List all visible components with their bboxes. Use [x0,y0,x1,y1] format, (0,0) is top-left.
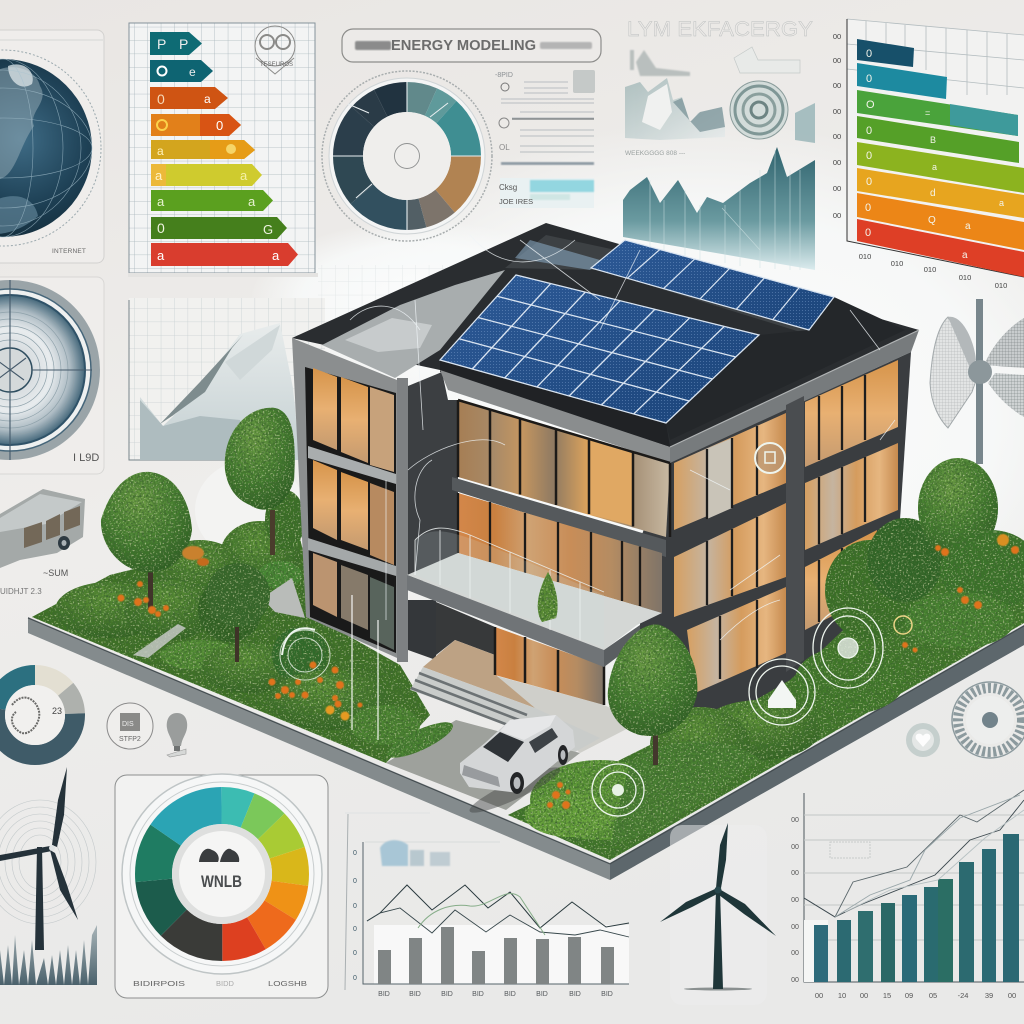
y labels: 00 [791,817,799,824]
turbine [0,767,78,950]
rating arrow H: G [263,222,273,237]
heading: efficiency chart: LYM EKFACERGY [627,18,813,41]
x labels: BID [378,991,390,998]
label: legend heading: -8PID [495,72,513,79]
area chart: upper mountains [625,78,815,143]
rating arrow D: 0 [216,118,223,133]
rating arrow B [150,60,213,82]
y labels: 0 [353,975,357,982]
y axis labels [833,32,841,220]
x labels: 00 [815,991,823,1000]
rating arrow E [151,140,255,159]
y axis labels: 00 [833,184,841,193]
bar glyphs: 0 [866,125,872,137]
chart blob icon [380,840,450,866]
x labels: BID [504,991,516,998]
rating arrow E: a [157,144,164,158]
y axis labels: 00 [833,107,841,116]
bar glyphs: 0 [866,73,872,85]
icon: step badge [107,703,153,749]
x labels: BID [409,991,421,998]
label: gauge captions: LOGSHB [268,979,307,988]
panel: globe [0,30,104,263]
hologram: window badge [755,443,785,473]
icon: bus [0,489,85,596]
hologram: small badge [894,616,912,634]
x labels: BID [569,991,581,998]
hologram: lawn ring [592,764,644,816]
y axis labels: 00 [833,81,841,90]
bar glyphs: B [930,135,936,145]
label: gauge captions: BIDD [216,979,235,988]
bar row 3 teal end [950,104,1018,136]
x axis labels: 010 [995,281,1007,290]
bar row 3 [857,90,1018,136]
text panel: donut legend [495,70,595,208]
windows: upper front [458,400,670,537]
x axis labels: 010 [959,273,971,282]
gauge ring [154,806,290,942]
small donut chart [0,675,75,755]
building [292,223,919,753]
ground platform [28,617,1024,880]
center pillar [397,372,458,662]
rating arrow G: a [157,194,165,209]
panel: gauge [115,774,328,998]
y labels: 0 [353,926,357,933]
label: dial caption: I L9D [73,452,99,464]
windows: left facade [313,368,394,650]
rating arrow I [151,243,298,266]
rating arrow I: a [272,248,280,263]
windows: right facade section two [805,360,898,630]
icon: bus: UIDHJT 2.3 [0,587,42,596]
panel: efficiency charts [623,18,815,270]
y axis labels: 00 [833,32,841,41]
tree: left foreground [101,472,192,610]
icon: lightbulb [167,713,187,757]
x labels: -24 [958,991,968,1000]
x axis labels: 010 [859,252,871,261]
x labels: 39 [985,991,993,1000]
hologram: light columns [352,595,378,740]
label: gauge center: WNLB [201,872,242,891]
tree: rear [225,408,295,555]
solar array: main [440,275,759,423]
bar glyphs: O [866,99,875,111]
bar row 7 [857,193,1024,250]
bar sparkline [0,925,97,985]
x axis labels: 010 [891,259,903,268]
y labels: 00 [791,897,799,904]
bar glyphs: a [932,162,937,172]
floor band: front [452,477,666,557]
bar row 2 [857,63,947,99]
x labels: 00 [1008,991,1016,1000]
y labels: 0 [353,903,357,910]
bar row 8 [857,219,1024,277]
shrubs: front left [160,627,420,745]
entry steps [410,667,600,752]
icon: gear dial [952,682,1024,758]
bar glyphs: 0 [865,202,871,214]
donut chart [322,71,492,241]
ground floor entrance [423,602,640,753]
y labels: 00 [791,977,799,984]
y labels: 00 [791,950,799,957]
x labels: 10 [838,991,846,1000]
rating arrow G: a [248,194,256,209]
growth bars [804,834,1019,982]
icon: heart button [906,723,940,757]
bar glyphs [865,48,1004,261]
car [460,715,575,819]
label: step: STFP2 [119,736,141,743]
y labels: 00 [791,844,799,851]
bar row 6 [857,168,1024,218]
bar glyphs: a [965,221,971,232]
flowers: orange blooms [118,534,1019,809]
label: globe caption: INTERNET [52,248,86,255]
y labels: 00 [791,924,799,931]
path: garden walkway [133,578,305,658]
panel: line and bar chart [345,813,629,998]
rating arrow A [150,32,202,55]
driveway [386,720,580,810]
windows: right facade section one [674,413,786,693]
bars [378,927,614,984]
tree: front right [608,624,697,765]
bar glyphs: = [925,108,930,118]
front fascia [440,330,919,463]
roof [292,223,919,447]
line series [367,885,629,937]
y labels: 0 [353,950,357,957]
hologram: house ring [749,659,815,725]
rating arrow A: P [157,36,166,52]
y labels: 00 [791,870,799,877]
y axis labels: 00 [833,56,841,65]
right wall [640,352,911,735]
label: chart caption: WEEKGGGG 808 --- [625,150,685,157]
x labels: BID [472,991,484,998]
rating arrow G [151,190,273,211]
panel: circular dial [0,277,104,474]
contour sketch [0,800,96,924]
x labels: BID [441,991,453,998]
area chart: lower mountains [623,147,815,270]
icon: fan turbine [930,299,1024,464]
rating arrow H: 0 [157,220,165,236]
icon: target rings [730,81,788,139]
heading: energy modeling: ENERGY MODELING [391,38,536,54]
label: gauge captions [133,979,307,988]
x labels: 15 [883,991,891,1000]
y labels: 0 [353,878,357,885]
bar row 5 [857,142,1024,193]
panel: left wind turbine [0,767,97,985]
icon: chart seal: TESEUROS [260,62,293,68]
icon: step badge: DIS [122,721,134,728]
rating arrow F: a [240,168,248,183]
bar glyphs: 0 [865,227,871,239]
rating arrow D [151,114,241,136]
hologram: garden ring [280,628,330,680]
rating arrow C: 0 [157,91,165,107]
panel: right stacked bar chart [833,19,1024,290]
solar array: upper [591,240,834,330]
x labels: 05 [929,991,937,1000]
bar glyphs: 0 [866,150,872,162]
y axis labels: 00 [833,132,841,141]
windows: middle front [458,493,662,613]
hologram: energy ring [813,608,883,688]
bar row 4 [857,116,1019,163]
x labels: 09 [905,991,913,1000]
plant: balcony shrub [538,572,558,622]
bar row 1 [857,39,914,67]
label: bus captions: ~SUM [43,568,68,578]
panel: energy rating chart [128,23,318,277]
rating arrow C [150,87,228,109]
panel: center wind turbine [660,823,776,1005]
bar glyphs: a [962,250,968,261]
rating arrow B: e [189,65,196,79]
bar glyphs: 0 [866,48,872,60]
tree: small mid garden [206,563,270,662]
text panel: donut legend: OL [499,143,510,152]
x labels: BID [601,991,613,998]
bar glyphs: d [930,188,936,199]
bar glyphs: a [999,198,1004,208]
bar glyphs: Q [928,215,936,226]
rating arrow F [151,164,262,186]
label: donut value: 23 [52,706,62,716]
x axis labels [859,252,1007,290]
growth lines [804,790,1024,917]
y axis labels: 00 [833,211,841,220]
label: gauge captions: BIDIRPOIS [133,979,185,988]
icon: chart seal [255,26,295,74]
label: legend values: Cksg [499,183,517,192]
left facade [292,338,406,662]
rating arrow A: P [179,36,188,52]
rating arrow I: a [157,248,165,263]
icon: gauge glyph [199,849,239,862]
rating arrow F: a [155,168,163,183]
shrubs: rear left [55,490,305,642]
title pill [342,29,601,62]
rating arrow C: a [204,92,211,106]
x labels: 00 [860,991,868,1000]
balcony [407,528,662,667]
pillar: right facade [786,396,804,672]
holographic overlays [280,235,912,816]
rating arrow H [151,217,287,239]
panel: growth chart [791,790,1024,1000]
y labels: 0 [353,850,357,857]
y axis labels: 00 [833,158,841,167]
text panel: donut legend: JOE IRES [499,197,533,206]
x labels: BID [536,991,548,998]
garden: front shrubs [383,458,1024,845]
hologram: wire sketches [350,235,895,640]
y labels [791,817,799,984]
x labels [815,991,1016,1000]
garden: lawns and shrubs [32,490,1024,860]
x axis labels: 010 [924,265,936,274]
bar glyphs: 0 [866,176,872,188]
y labels [353,850,357,982]
x labels [378,991,613,998]
panel: mountain line chart [129,298,325,460]
